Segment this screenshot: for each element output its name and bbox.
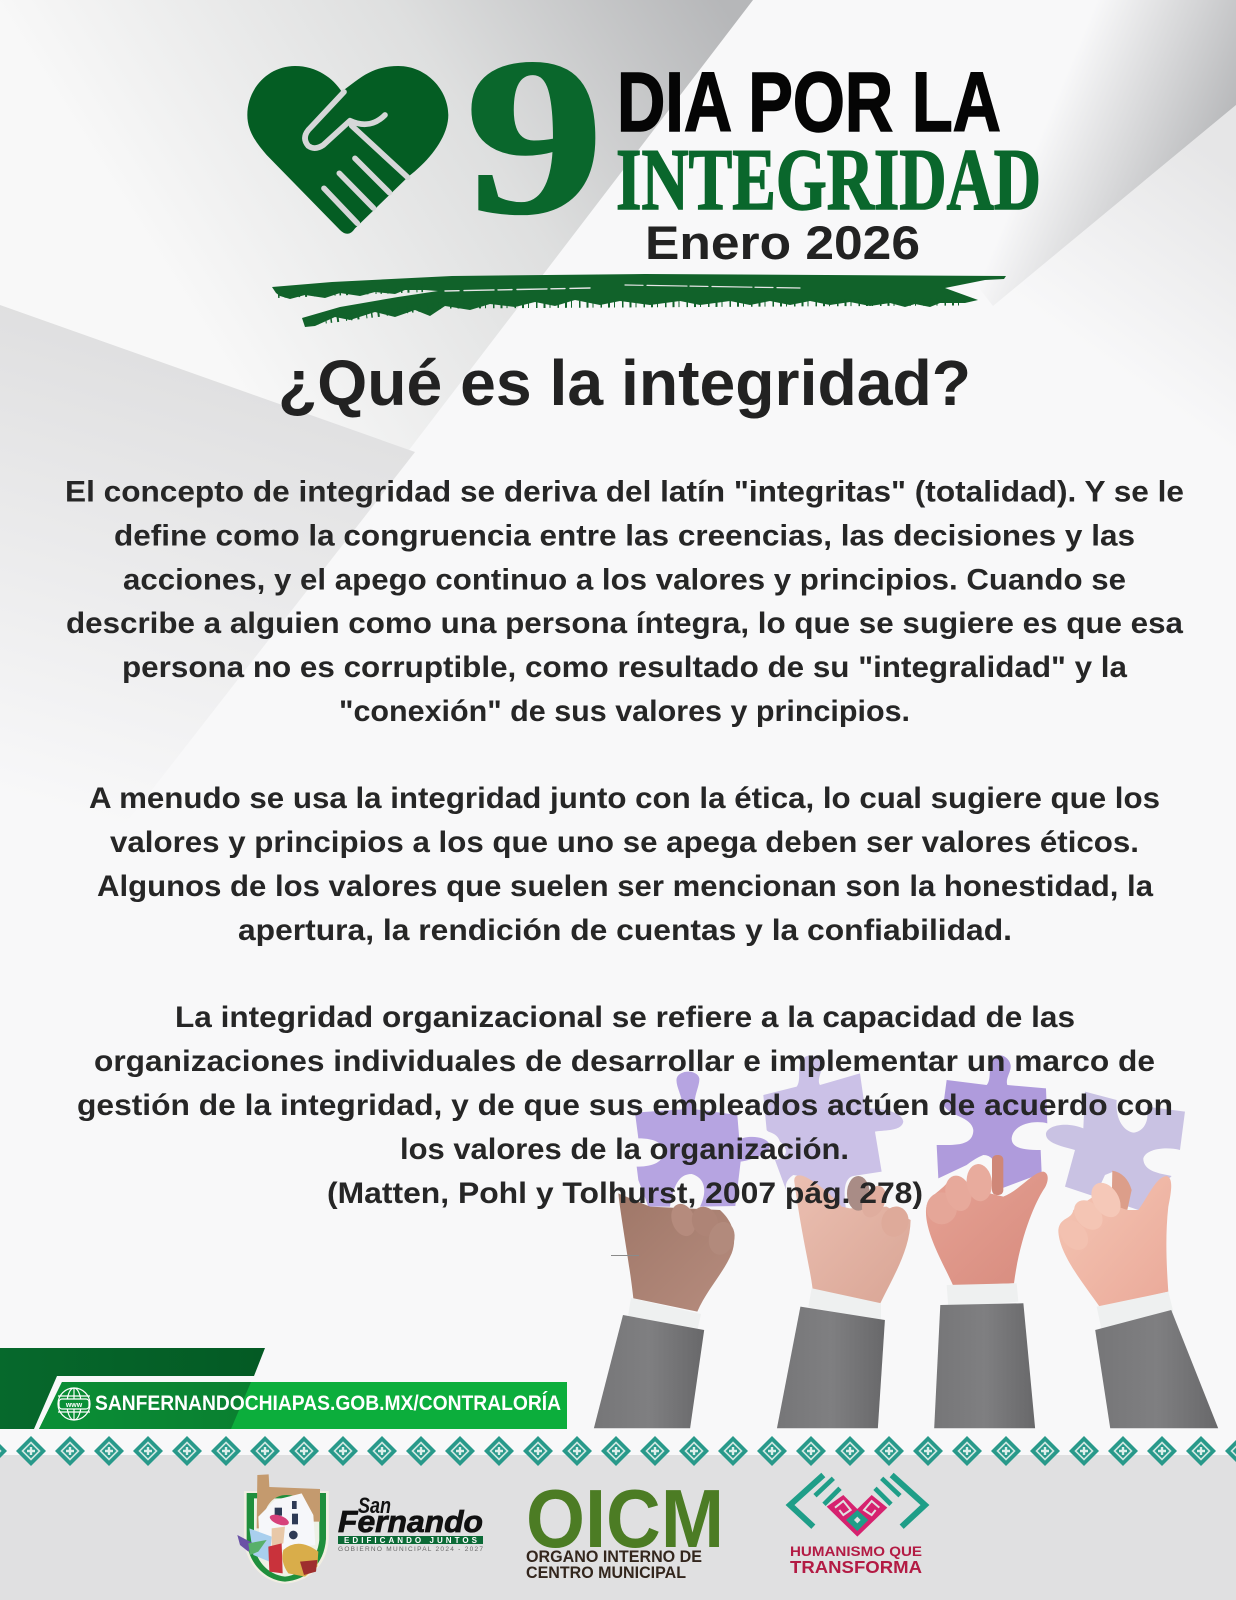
heading: ¿Qué es la integridad? (278, 347, 971, 419)
icon: heart with handshake (247, 66, 448, 234)
text block: definition: acciones, y el apego continuo a los valores y principios. Cuando se (123, 563, 1126, 596)
illustration: hands holding puzzle pieces (594, 1055, 1218, 1428)
logo: San Fernando: Fernando (338, 1504, 483, 1539)
text block: definition (65, 476, 1184, 728)
shield (237, 1474, 329, 1584)
brush stroke (272, 274, 1006, 327)
logo: Humanismo que Transforma: HUMANISMO QUE (790, 1543, 922, 1559)
decorative diamond border (0, 1436, 1236, 1466)
suit sleeves (594, 1303, 1218, 1428)
text block: definition: "conexión" de sus valores y principios. (339, 695, 910, 728)
hand 1 with puzzle piece (618, 1072, 770, 1332)
text block: definition: El concepto de integridad se deriva del latín "integritas" (totalidad). Y se le (65, 476, 1184, 508)
text block: definition: persona no es corruptible, como resultado de su "integralidad" y la (122, 651, 1127, 684)
icon: globe (58, 1388, 90, 1420)
small stray line (611, 1255, 639, 1256)
logo: OICM: ORGANO INTERNO DE (526, 1547, 702, 1566)
text block: ethics: A menudo se usa la integridad junto con la ética, lo cual sugiere que los (89, 782, 1160, 815)
website url: SANFERNANDOCHIAPAS.GOB.MX/CONTRALORÍA (95, 1392, 561, 1415)
wordmark: San (358, 1493, 391, 1518)
header logo (247, 11, 1041, 327)
hand 3 with puzzle piece (926, 1055, 1048, 1307)
text block: organizational integrity: los valores de la organización. (400, 1133, 849, 1166)
title line 1: DIA POR LA (617, 55, 1001, 149)
logo: Humanismo que Transforma: TRANSFORMA (790, 1557, 922, 1577)
icon: hands and heart (790, 1475, 925, 1537)
hand 2 with puzzle piece (763, 1055, 913, 1320)
logo: OICM: CENTRO MUNICIPAL (526, 1563, 686, 1582)
logo: Humanismo que Transforma (790, 1475, 925, 1577)
title line 2: INTEGRIDAD (616, 132, 1041, 229)
text block: ethics: apertura, la rendición de cuentas y la confiabilidad. (238, 914, 1012, 947)
text block: definition: define como la congruencia entre las creencias, las decisiones y las (114, 519, 1135, 552)
text block: organizational integrity (77, 1001, 1173, 1210)
hand 4 with puzzle piece (1046, 1092, 1185, 1330)
logo: San Fernando: GOBIERNO MUNICIPAL 2024 - 2027 (338, 1546, 483, 1553)
icon: globe: www (65, 1402, 83, 1409)
footer band (0, 1455, 1236, 1600)
website banner (0, 1348, 567, 1429)
big number 9: 9 (465, 11, 604, 261)
text block: organizational integrity: (Matten, Pohl y Tolhurst, 2007 pág. 278) (327, 1177, 923, 1210)
text block: organizational integrity: La integridad organizacional se refiere a la capacidad de las (175, 1001, 1075, 1034)
text block: definition: describe a alguien como una persona íntegra, lo que se sugiere es que esa (66, 607, 1183, 640)
text block: organizational integrity: gestión de la integridad, y de que sus empleados actúen de acuerdo con (77, 1089, 1173, 1122)
logo: San Fernando (237, 1474, 483, 1584)
text block: ethics: valores y principios a los que uno se apega deben ser valores éticos. (110, 826, 1139, 859)
text block: organizational integrity: organizaciones individuales de desarrollar e implementar un marco de (94, 1045, 1155, 1078)
logo: OICM: OICM (526, 1472, 724, 1565)
logo: San Fernando: EDIFICANDO JUNTOS (344, 1536, 478, 1545)
text block: ethics (89, 782, 1160, 947)
date: Enero 2026 (645, 216, 920, 269)
text block: ethics: Algunos de los valores que suelen ser mencionan son la honestidad, la (97, 870, 1153, 903)
